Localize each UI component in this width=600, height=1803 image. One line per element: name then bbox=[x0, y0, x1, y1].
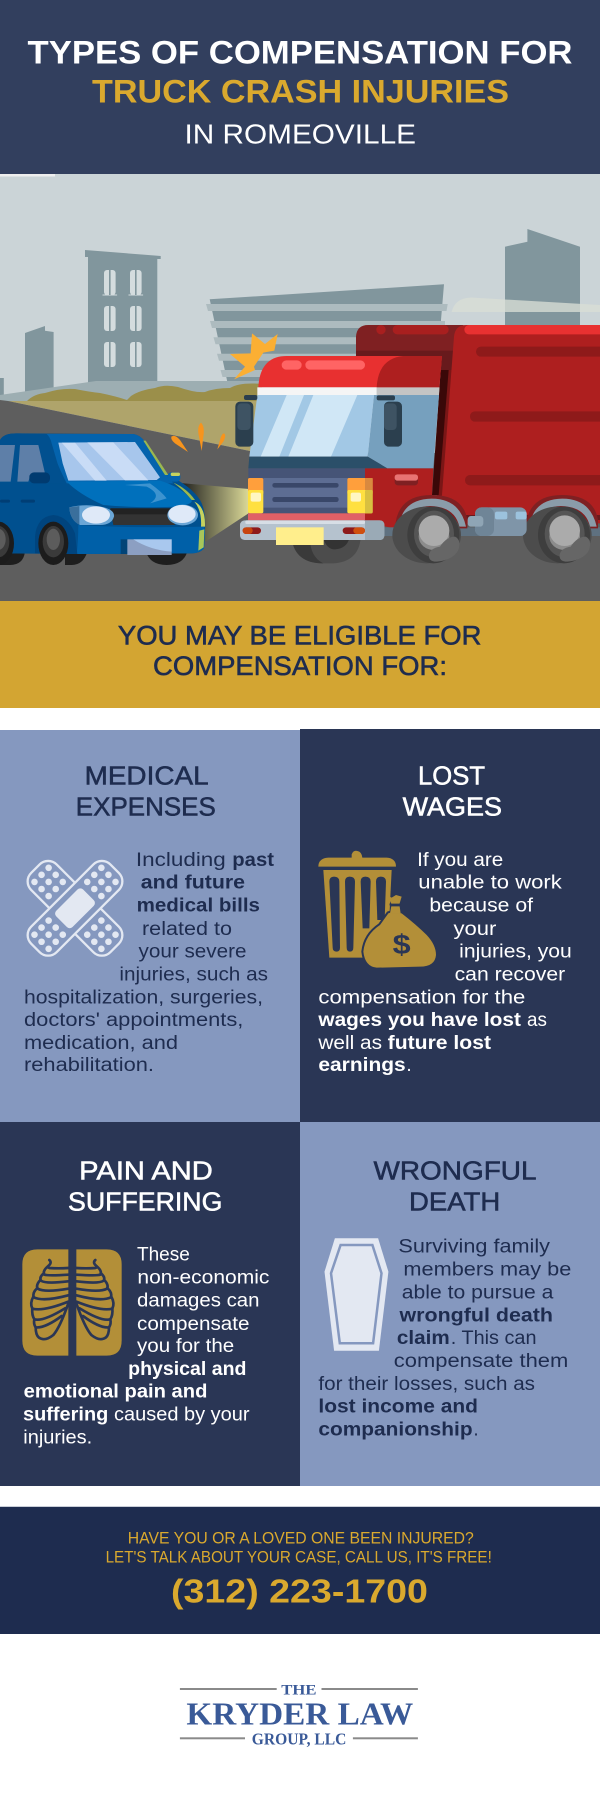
logo: the kryder law group: GROUP, LLC bbox=[252, 1729, 346, 1748]
hood bbox=[67, 481, 192, 507]
text: medical expenses body bbox=[24, 850, 275, 1076]
text: pain and suffering body: injuries. bbox=[23, 1428, 92, 1449]
panel: wrongful death bbox=[300, 1122, 600, 1486]
text: wrongful death body: able to pursue a bbox=[402, 1283, 554, 1304]
icon: coffin bbox=[324, 1238, 388, 1351]
headlight beam bbox=[180, 483, 249, 542]
heading: wrongful death: WRONGFUL bbox=[374, 1155, 536, 1185]
text: lost wages body: well as bbox=[317, 1033, 382, 1054]
text: lost wages body: earnings bbox=[318, 1055, 406, 1076]
heading: wrongful death bbox=[374, 1155, 536, 1216]
text: pain and suffering body: physical and bbox=[128, 1359, 246, 1380]
text: wrongful death body: Surviving family bbox=[398, 1237, 551, 1258]
text: pain and suffering body: suffering bbox=[23, 1405, 108, 1426]
text: lost wages body: because of bbox=[429, 896, 534, 917]
text: wrongful death body: claim bbox=[397, 1328, 450, 1349]
title line 1: TYPES OF COMPENSATION FOR bbox=[28, 34, 572, 70]
icon: trash can and money bag bbox=[318, 851, 436, 968]
text: medical expenses body: doctors' appointments, bbox=[24, 1010, 243, 1031]
text: medical expenses body: your severe bbox=[138, 941, 246, 962]
field bbox=[8, 401, 262, 453]
text: wrongful death body: . bbox=[473, 1420, 479, 1441]
text: medical expenses body: medical bills bbox=[137, 896, 260, 917]
eligibility banner: COMPENSATION FOR: bbox=[153, 651, 447, 681]
text: lost wages body: your bbox=[454, 919, 497, 940]
title line 2: TRUCK CRASH INJURIES bbox=[92, 74, 509, 110]
front wheels bbox=[310, 540, 360, 564]
text: pain and suffering body: you for the bbox=[137, 1336, 234, 1357]
heading: lost wages: WAGES bbox=[403, 791, 502, 821]
hero illustration: truck crash scene bbox=[0, 174, 600, 601]
cargo box bbox=[430, 325, 600, 523]
headlights bbox=[69, 505, 114, 525]
heading: medical expenses bbox=[76, 760, 216, 821]
heading: pain and suffering bbox=[68, 1155, 222, 1216]
text: medical expenses body: rehabilitation. bbox=[24, 1055, 154, 1076]
bumper bbox=[77, 525, 205, 554]
road bbox=[0, 400, 600, 601]
cab door bbox=[365, 468, 433, 528]
frame bbox=[382, 527, 600, 536]
impact starburst bbox=[230, 333, 278, 379]
text: wrongful death body: members may be bbox=[403, 1260, 571, 1281]
text: lost wages body: unable to work bbox=[418, 873, 562, 894]
heading: medical expenses: MEDICAL bbox=[85, 760, 209, 790]
car body bbox=[0, 433, 205, 554]
heading: pain and suffering: SUFFERING bbox=[68, 1186, 222, 1216]
rear wheel two bbox=[523, 495, 598, 563]
text: wrongful death body: . This can bbox=[451, 1328, 536, 1349]
icon: rib cage bbox=[22, 1249, 122, 1356]
text: pain and suffering body: damages can bbox=[137, 1291, 260, 1312]
text: pain and suffering body: compensate bbox=[137, 1314, 250, 1335]
truck headlights bbox=[248, 478, 263, 495]
text: pain and suffering body: These bbox=[137, 1245, 190, 1266]
icon: trash can and money bag: $ bbox=[393, 929, 411, 960]
fuel tank bbox=[475, 507, 527, 536]
icon: bandage bbox=[23, 856, 127, 961]
title line 3: IN ROMEOVILLE bbox=[184, 119, 416, 150]
logo: the kryder law group: KRYDER LAW bbox=[186, 1695, 413, 1731]
red truck bbox=[235, 325, 600, 563]
text: wrongful death body: compensate them bbox=[394, 1351, 568, 1372]
side mirrors bbox=[244, 395, 257, 400]
wheels bbox=[35, 515, 77, 554]
windshield edge bbox=[143, 441, 168, 475]
text: wrongful death body: for their losses, such as bbox=[318, 1374, 535, 1395]
text: pain and suffering body bbox=[23, 1245, 269, 1449]
heading: wrongful death: DEATH bbox=[409, 1186, 500, 1216]
call to action band bbox=[0, 1506, 600, 1634]
rear wheel one bbox=[392, 495, 467, 563]
mirrors bbox=[29, 472, 50, 483]
text: pain and suffering body: caused by your bbox=[114, 1405, 250, 1426]
text: lost wages body: can recover bbox=[455, 964, 566, 985]
header panel bbox=[0, 0, 600, 174]
car bbox=[0, 433, 205, 565]
heading: medical expenses: EXPENSES bbox=[76, 791, 216, 821]
heading: pain and suffering: PAIN AND bbox=[79, 1155, 213, 1185]
phone number: (312) 223-1700 bbox=[171, 1573, 428, 1610]
text: medical expenses body: medication, and bbox=[24, 1033, 178, 1054]
panel: medical expenses bbox=[0, 730, 300, 1122]
text: lost wages body: future lost bbox=[388, 1033, 492, 1054]
panel: pain and suffering bbox=[0, 1122, 300, 1486]
text: pain and suffering body: non-economic bbox=[137, 1268, 269, 1289]
text: wrongful death body bbox=[318, 1237, 571, 1441]
bumper bbox=[240, 520, 384, 540]
grille bbox=[248, 468, 365, 513]
side windows bbox=[0, 445, 15, 482]
text: lost wages body: injuries, you bbox=[459, 941, 572, 962]
text: medical expenses body: hospitalization, surgeries, bbox=[24, 987, 263, 1008]
text: medical expenses body: Including bbox=[136, 850, 226, 871]
text: lost wages body bbox=[317, 850, 572, 1076]
door details bbox=[0, 500, 10, 503]
cab windows bbox=[368, 395, 439, 468]
cab roof bbox=[258, 356, 442, 387]
logo: the kryder law group bbox=[180, 1682, 418, 1748]
hill and bushes bbox=[0, 381, 262, 402]
text: medical expenses body: past bbox=[232, 850, 275, 871]
text: medical expenses body: related to bbox=[142, 919, 232, 940]
city buildings bbox=[0, 229, 600, 396]
grille bbox=[110, 508, 175, 525]
text: lost wages body: wages you have lost bbox=[317, 1010, 522, 1031]
eligibility banner bbox=[0, 601, 600, 708]
panel: lost wages bbox=[300, 729, 600, 1122]
text: medical expenses body: injuries, such as bbox=[119, 964, 268, 985]
text: lost wages body: as bbox=[527, 1010, 547, 1031]
eligibility banner: YOU MAY BE ELIGIBLE FOR bbox=[118, 620, 481, 650]
tires below body bbox=[0, 554, 186, 565]
text: wrongful death body: companionship bbox=[318, 1420, 473, 1441]
text: wrongful death body: lost income and bbox=[318, 1397, 478, 1418]
cargo back top bbox=[356, 325, 464, 351]
text: wrongful death body: wrongful death bbox=[398, 1305, 553, 1326]
call to action band: LET'S TALK ABOUT YOUR CASE, CALL US, IT'S FREE! bbox=[106, 1548, 492, 1566]
logo: the kryder law group: THE bbox=[281, 1682, 316, 1698]
heading: lost wages bbox=[403, 760, 502, 821]
impact sparks bbox=[171, 423, 225, 452]
text: pain and suffering body: emotional pain and bbox=[24, 1382, 207, 1403]
text: lost wages body: If you are bbox=[417, 850, 503, 871]
text: medical expenses body: and future bbox=[141, 873, 245, 894]
text: lost wages body: . bbox=[406, 1055, 412, 1076]
text: lost wages body: compensation for the bbox=[318, 987, 525, 1008]
windshield bbox=[58, 442, 160, 481]
heading: lost wages: LOST bbox=[418, 760, 485, 790]
cta text: HAVE YOU OR A LOVED ONE BEEN INJURED? bbox=[128, 1529, 474, 1547]
licence plate bbox=[121, 539, 128, 554]
